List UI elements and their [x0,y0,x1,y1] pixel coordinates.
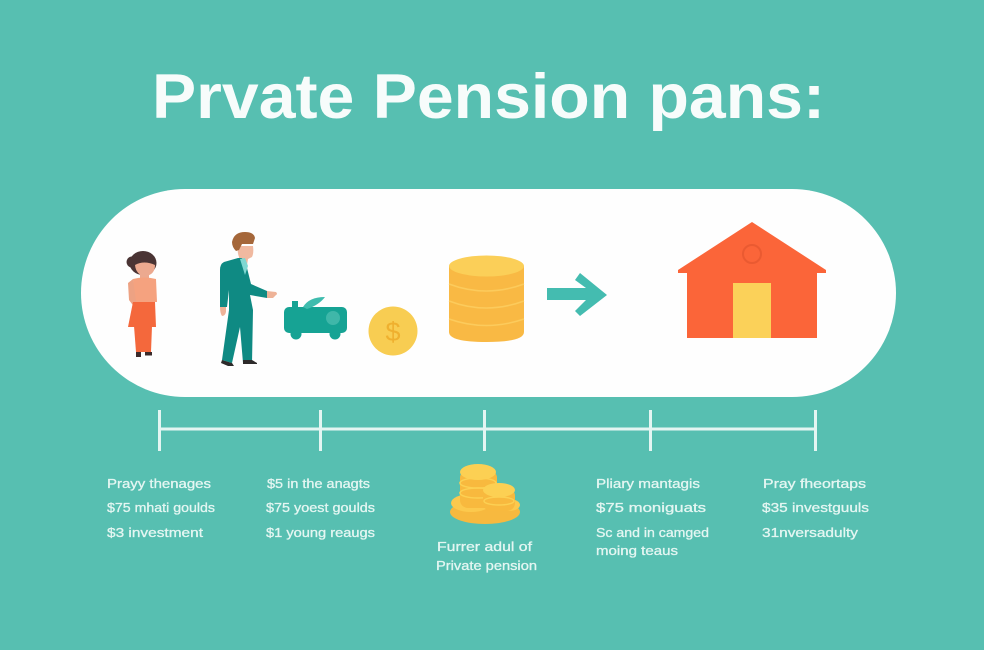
icon: dollar coin [368,306,418,356]
text block: column 4: $75 moniguats [596,500,707,515]
text block: column 4: Pliary mantagis [596,476,701,491]
text block: column 1: $75 mhati goulds [107,500,216,515]
icon: girl [126,251,157,357]
text block: column 5: $35 investguuls [762,500,870,515]
panel: white pill [81,189,896,397]
text block: column 5: Pray fheortaps [763,476,867,491]
text block: center caption: Furrer adul of [437,539,532,554]
text block: column 5 [762,476,870,540]
title: Prvate Pension pans: [152,62,825,132]
text block: column 5: 31nversadulty [762,525,859,540]
icon: dollar coin: $ [385,317,401,347]
text block: column 4: Sc and in camged [596,525,709,540]
icon: teal machine [284,297,347,340]
text block: center caption [436,539,537,573]
text block: column 2: $1 young reaugs [266,525,376,540]
icon: man in suit [220,232,277,366]
icon: house [678,222,826,338]
icon: coin stack [449,256,524,342]
text block: column 1: $3 investment [107,525,203,540]
text block: column 4: moing teaus [596,543,679,558]
timeline [160,410,816,451]
text block: column 1 [107,476,216,540]
icon: coin pile [450,464,520,524]
text block: column 1: Prayy thenages [107,476,212,491]
arrow [547,273,607,316]
text block: column 2: $75 yoest goulds [266,500,376,515]
text block: column 2: $5 in the anagts [267,476,371,491]
text block: column 2 [266,476,376,540]
text block: column 4 [596,476,709,558]
text block: center caption: Private pension [436,558,537,573]
